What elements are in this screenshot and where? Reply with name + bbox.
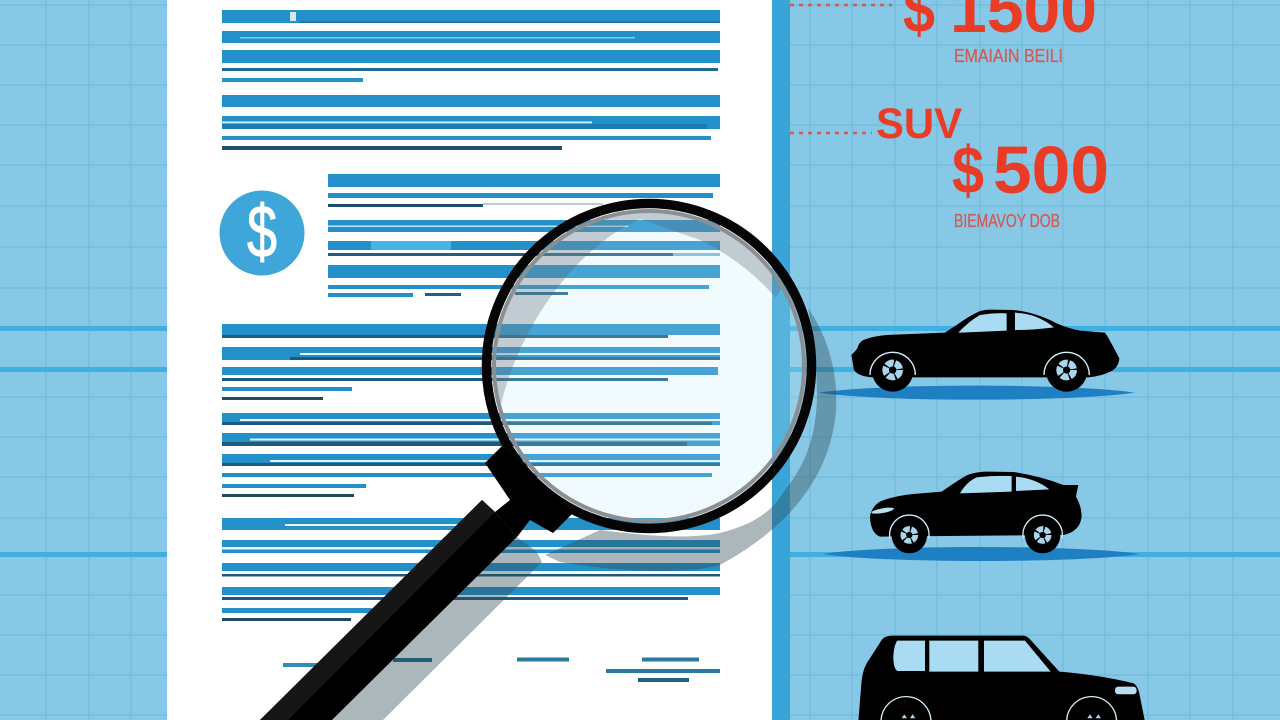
lens glare — [496, 213, 781, 404]
icon: sedan car — [818, 310, 1135, 400]
callout: SUV price: 500 — [993, 133, 1109, 208]
text block: third paragraph lines — [222, 324, 720, 497]
icon: coupe car — [823, 472, 1139, 561]
callout: SUV price: BIEMAVOY DOB — [954, 211, 1060, 231]
icon: SUV car — [858, 636, 1145, 720]
callout: upper price — [790, 0, 1097, 66]
callout: SUV price: $ — [952, 133, 984, 208]
panel: document page — [167, 0, 772, 720]
text block: signature lines — [283, 658, 720, 682]
icon: dollar coin — [220, 190, 304, 276]
icon: magnifying glass — [260, 190, 830, 720]
lens rim — [494, 211, 804, 521]
callout: upper price: EMAIAIN BEILI — [954, 46, 1063, 66]
handle — [260, 446, 573, 720]
callout: SUV price — [790, 100, 1109, 231]
text block: lines beside the dollar icon — [328, 174, 720, 297]
text block: fourth paragraph lines — [222, 518, 720, 621]
icon: dollar coin: $ — [247, 190, 277, 273]
text block: first paragraph lines — [222, 10, 720, 82]
callout: SUV price: SUV — [876, 100, 962, 148]
lens — [494, 211, 804, 521]
text block: second paragraph lines — [222, 95, 720, 150]
magnifier shadow — [332, 308, 836, 720]
